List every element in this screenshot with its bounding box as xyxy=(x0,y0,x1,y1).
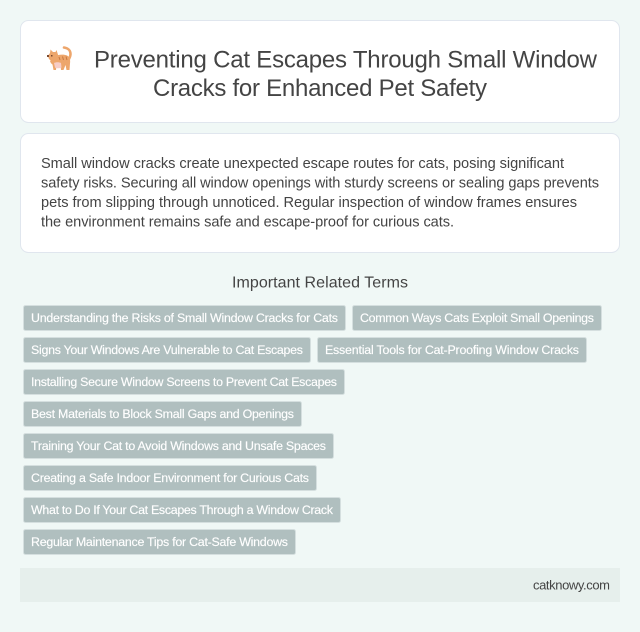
footer credit: catknowy.com xyxy=(533,578,610,592)
tag 2 xyxy=(352,306,602,330)
tag 4: Essential Tools for Cat-Proofing Window Cracks xyxy=(325,343,579,357)
tag 3 xyxy=(24,338,310,362)
tag 9 xyxy=(24,498,340,522)
summary text: the environment remains safe and escape-proof for curious cats. xyxy=(41,214,454,230)
tag 8 xyxy=(24,466,316,490)
tag 1 xyxy=(24,306,346,330)
tag 8: Creating a Safe Indoor Environment for Curious Cats xyxy=(31,471,309,485)
heading: related terms: Important Related Terms xyxy=(232,274,408,292)
title text: Preventing Cat Escapes Through Small Window xyxy=(94,46,598,74)
summary text: safety risks. Securing all window openings with sturdy screens or sealing gaps prevents xyxy=(41,176,599,192)
tag 5: Installing Secure Window Screens to Prevent Cat Escapes xyxy=(31,375,337,389)
tag 6: Best Materials to Block Small Gaps and Openings xyxy=(31,407,294,421)
tag 5 xyxy=(24,370,344,394)
title text: Cracks for Enhanced Pet Safety xyxy=(153,75,487,102)
title text xyxy=(94,46,598,102)
icon: cat xyxy=(47,48,70,70)
footer bar xyxy=(20,568,620,602)
panel: title card xyxy=(20,20,620,122)
panel: summary card xyxy=(20,134,620,252)
summary text: Small window cracks create unexpected escape routes for cats, posing significant xyxy=(41,156,564,172)
tag 9: What to Do If Your Cat Escapes Through a Window Crack xyxy=(31,503,334,517)
tag 3: Signs Your Windows Are Vulnerable to Cat Escapes xyxy=(31,343,303,357)
summary text: pets from slipping through unnoticed. Regular inspection of window frames ensures xyxy=(41,195,577,211)
tag 2: Common Ways Cats Exploit Small Openings xyxy=(360,311,594,325)
tag 1: Understanding the Risks of Small Window Cracks for Cats xyxy=(31,311,338,325)
tag 10 xyxy=(24,530,296,554)
tag 6 xyxy=(24,402,302,426)
tag 7 xyxy=(24,434,334,458)
summary text xyxy=(41,156,599,230)
panel: related term tags xyxy=(24,306,602,554)
tag 10: Regular Maintenance Tips for Cat-Safe Windows xyxy=(31,535,288,549)
tag 7: Training Your Cat to Avoid Windows and Unsafe Spaces xyxy=(31,439,326,453)
tag 4 xyxy=(318,338,586,362)
